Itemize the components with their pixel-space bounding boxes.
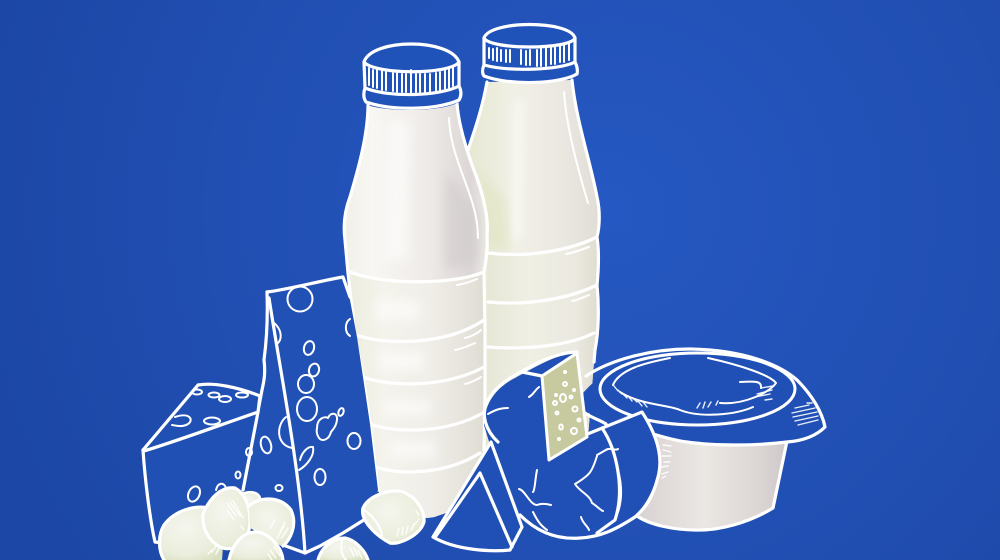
left bottle cap (364, 42, 461, 110)
cheese holes (259, 286, 360, 491)
tub lid rim (600, 353, 795, 425)
tub cup (637, 433, 787, 530)
mozzarella balls (159, 488, 424, 560)
small cheese block (143, 383, 260, 543)
right milk bottle (468, 23, 599, 450)
mozzarella ball right of bottle (363, 491, 424, 543)
right bottle cap (482, 23, 577, 83)
left bottle band lines (350, 272, 484, 472)
cheese wheel (484, 352, 660, 538)
mozzarella ball bottom (229, 532, 283, 560)
yogurt tub (583, 348, 825, 530)
right bottle band lines (488, 237, 597, 348)
mozzarella ball lower left (159, 507, 223, 560)
cheese wheel slice (433, 442, 522, 551)
left milk bottle (344, 42, 488, 518)
cut face holes (553, 371, 580, 440)
cheese wheel cut face (542, 353, 587, 460)
tall cheese wedge (243, 277, 378, 553)
mozzarella ball right (249, 499, 294, 547)
block holes (172, 390, 252, 504)
wheel rind cracks (488, 387, 621, 530)
tub lid (583, 348, 825, 445)
mozzarella ball lower centre (318, 538, 368, 560)
mozzarella ball behind (240, 492, 260, 510)
mozzarella ball upper middle (203, 488, 250, 549)
